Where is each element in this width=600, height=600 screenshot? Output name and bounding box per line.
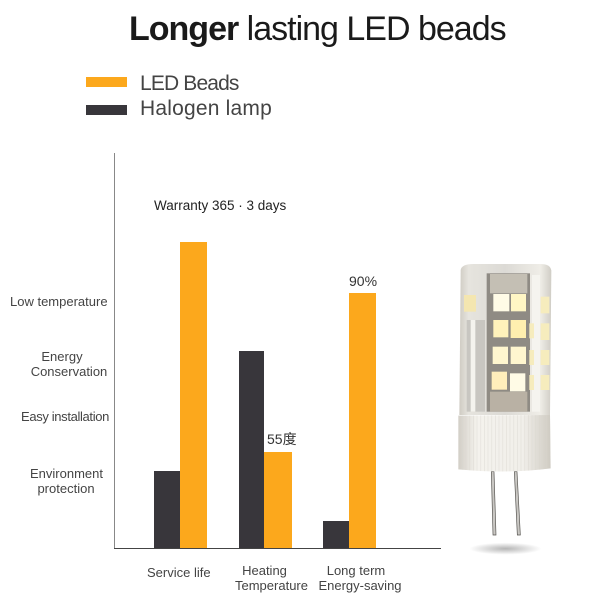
bar: energy saving LED [349,293,376,548]
cover [459,264,551,415]
y-axis labels [10,294,109,496]
y-axis labels: protection [37,481,95,496]
legend: LED Beads: LED Beads [140,72,239,95]
annotation: 90%: 90% [349,273,377,289]
x label: energy saving: Energy-saving [318,578,402,593]
y-axis labels: Low temperature [10,294,108,309]
inner LED column [487,273,530,412]
y-axis labels: Conservation [31,364,107,379]
x label: heating temperature [235,563,308,593]
bar: service life LED [180,242,207,548]
x label: energy saving [318,563,402,593]
x label: energy saving: Long term [327,563,385,578]
shadow [469,543,541,555]
title: Longer lasting LED beads [129,10,506,48]
y-axis labels: Environment [30,466,103,481]
pins [491,472,520,535]
y-axis labels: Easy installation [21,409,109,424]
legend: LED Beads [86,72,239,95]
side details [464,295,476,312]
bar: heating LED [264,452,292,548]
legend: Halogen lamp: Halogen lamp [140,97,272,120]
x label: heating temperature: Heating [242,563,287,578]
bar chart [114,153,441,549]
y-axis labels: Energy [41,349,83,364]
bar: heating halogen [239,351,264,548]
x label: heating temperature: Temperature [235,578,308,593]
annotation: 55 degrees: 55度 [267,431,297,447]
annotation: warranty: Warranty 365 · 3 days [154,198,286,213]
bar: service life halogen [154,471,180,548]
base [458,415,551,471]
icon: LED bulb photo [458,264,552,554]
bar: energy saving halogen [323,521,349,548]
x label: service life: Service life [147,565,211,580]
